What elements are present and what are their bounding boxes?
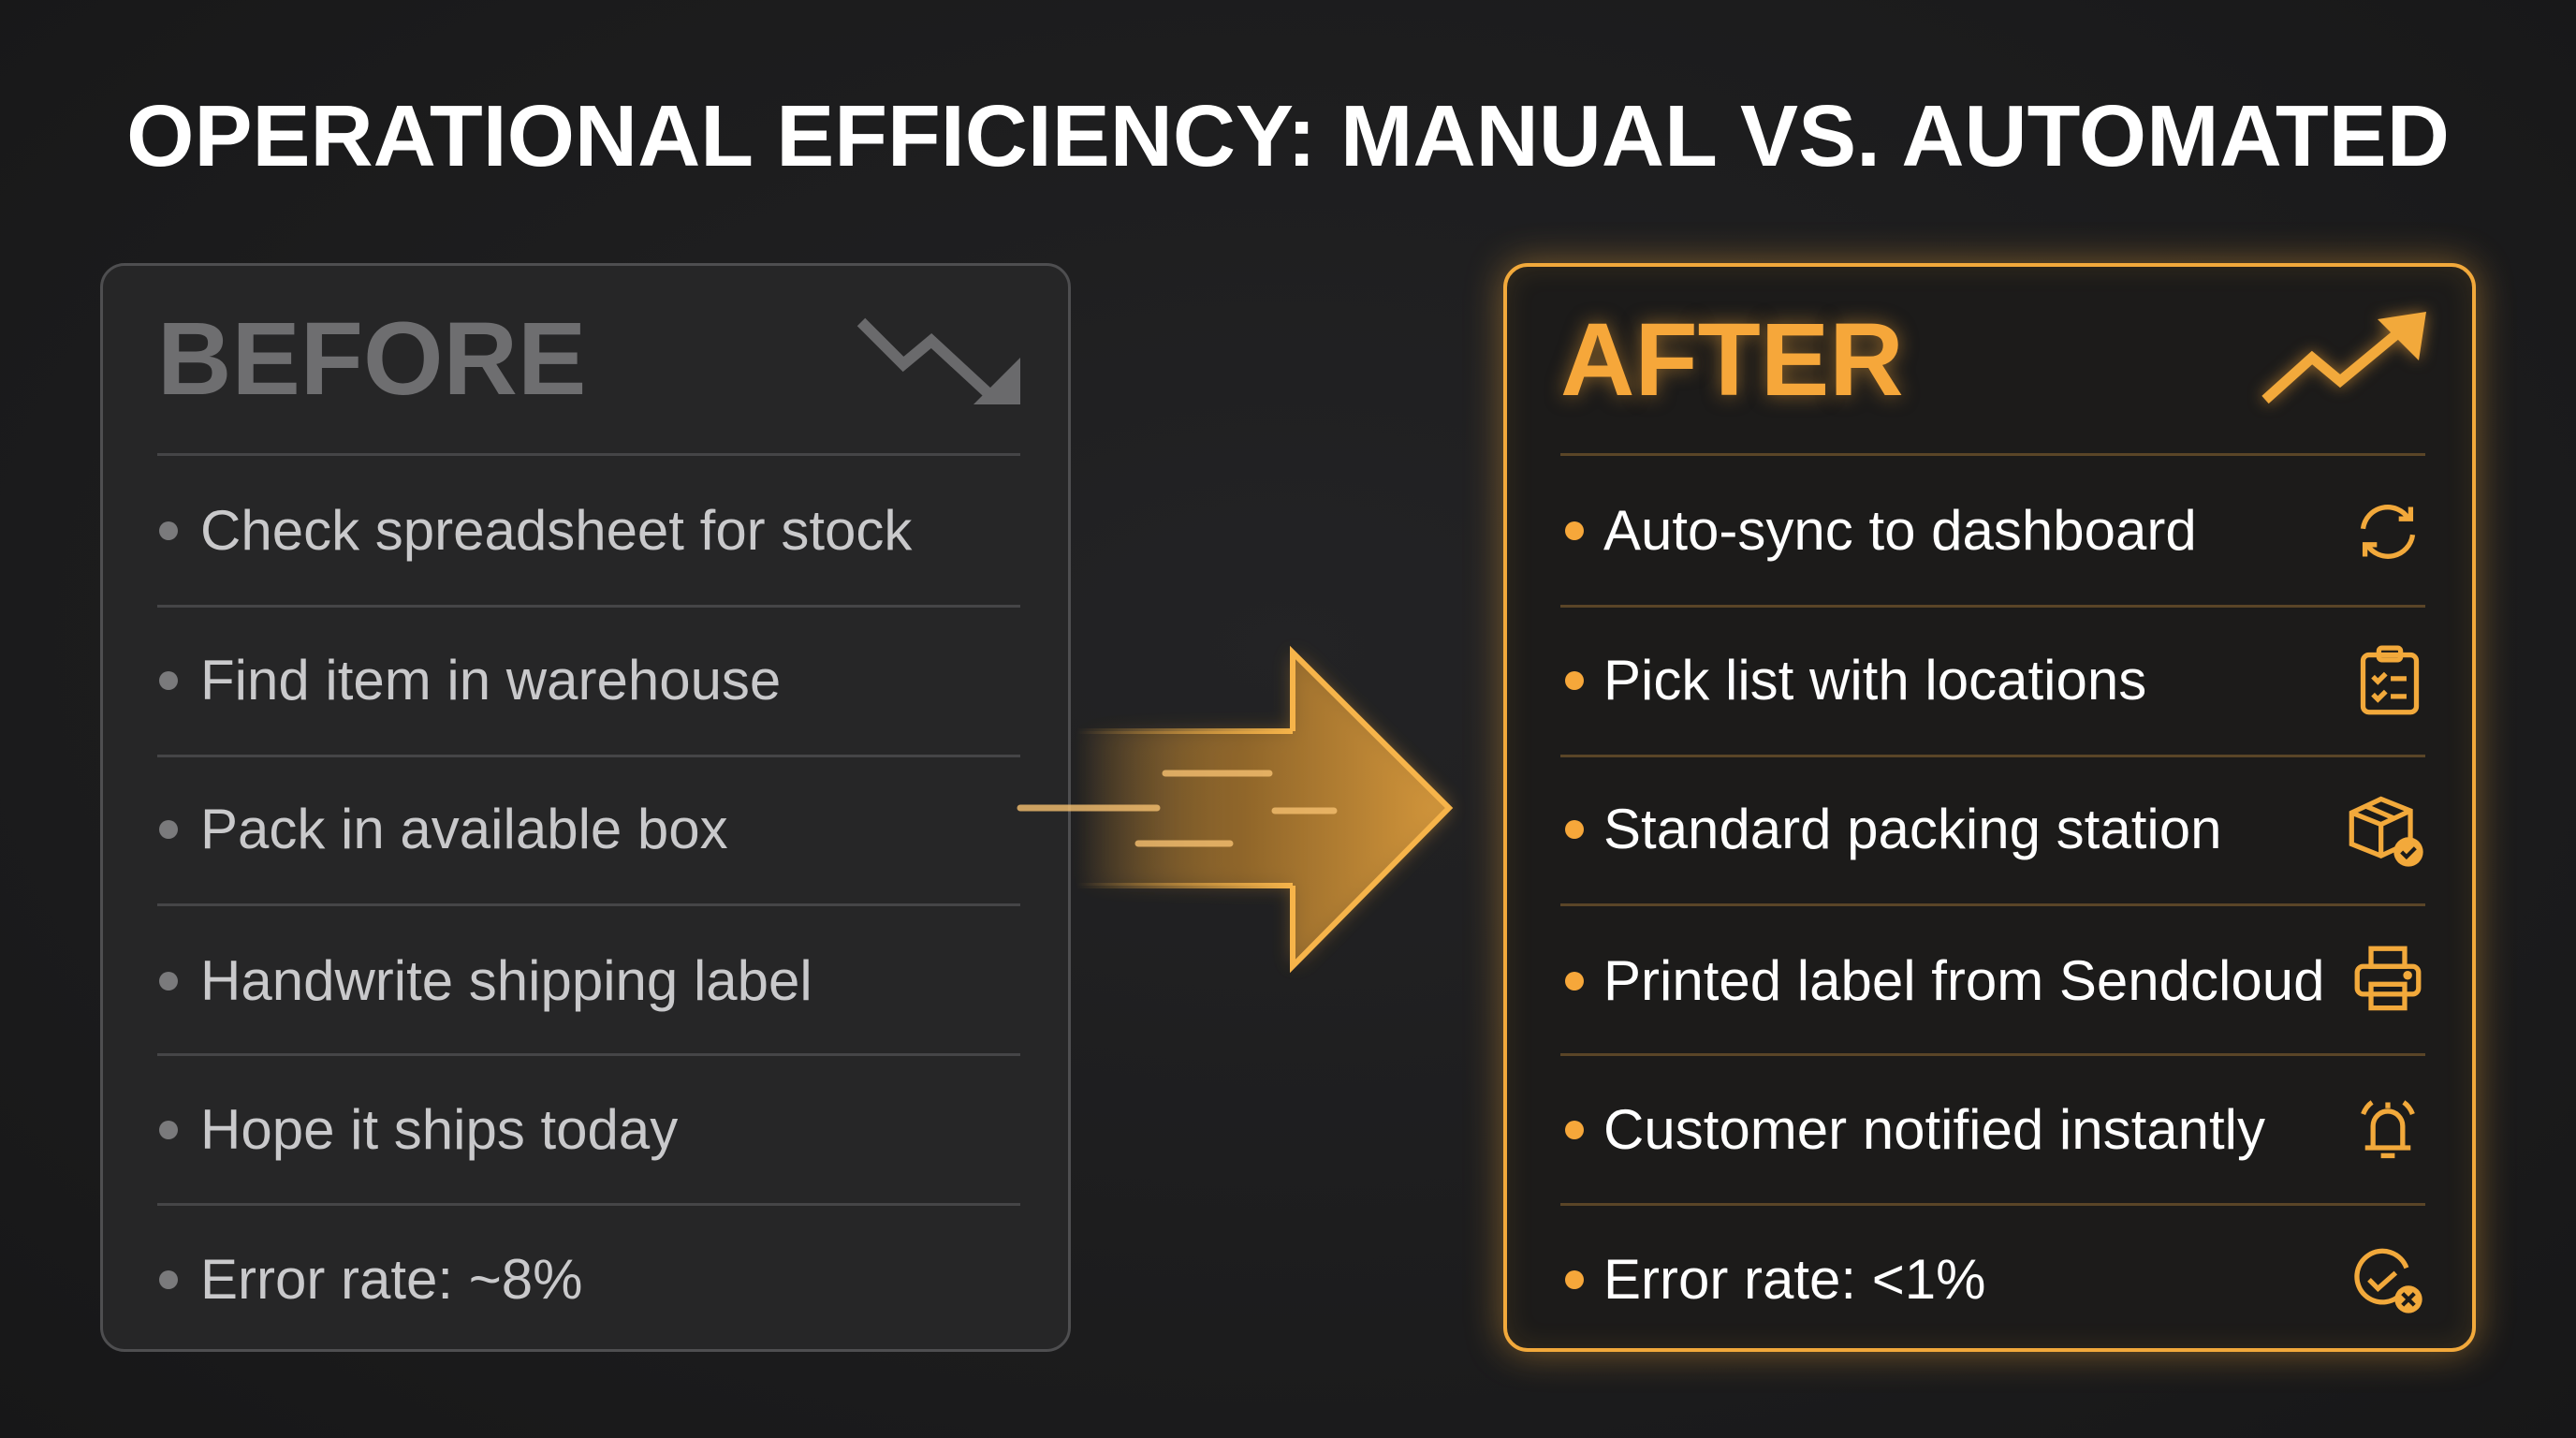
- item: find item: Find item in warehouse: [200, 649, 781, 712]
- item: pick list: Pick list with locations: [1603, 649, 2146, 712]
- icon: check with x: [2354, 1249, 2422, 1313]
- item: check spreadsheet: Check spreadsheet for stock: [200, 499, 912, 562]
- panel: before: [100, 263, 1071, 1352]
- item: customer notified: Customer notified instantly: [1603, 1098, 2265, 1161]
- item: error rate: Error rate: ~8%: [200, 1248, 582, 1311]
- title: OPERATIONAL EFFICIENCY: MANUAL VS. AUTOMATED: [126, 87, 2450, 184]
- item: hope: Hope it ships today: [200, 1098, 678, 1161]
- icon: printer: [2355, 946, 2421, 1011]
- icon: trend up: [2256, 303, 2435, 410]
- icon: sync: [2361, 505, 2415, 559]
- item: error rate: Error rate: <1%: [1603, 1248, 1986, 1311]
- item: pack: Pack in available box: [200, 798, 728, 860]
- icon: clipboard: [2361, 646, 2419, 715]
- item: packing station: Standard packing station: [1603, 798, 2221, 860]
- arrow: before to after: [1017, 646, 1456, 974]
- item: auto-sync: Auto-sync to dashboard: [1603, 499, 2197, 562]
- panel: after: [1503, 263, 2476, 1352]
- item: printed label: Printed label from Sendcloud: [1603, 949, 2324, 1012]
- heading: BEFORE: BEFORE: [157, 301, 586, 417]
- heading: AFTER: AFTER: [1560, 302, 1904, 418]
- icon: bell: [2361, 1100, 2415, 1159]
- icon: trend down: [857, 318, 1020, 404]
- icon: box check: [2349, 796, 2423, 867]
- item: handwrite: Handwrite shipping label: [200, 949, 812, 1012]
